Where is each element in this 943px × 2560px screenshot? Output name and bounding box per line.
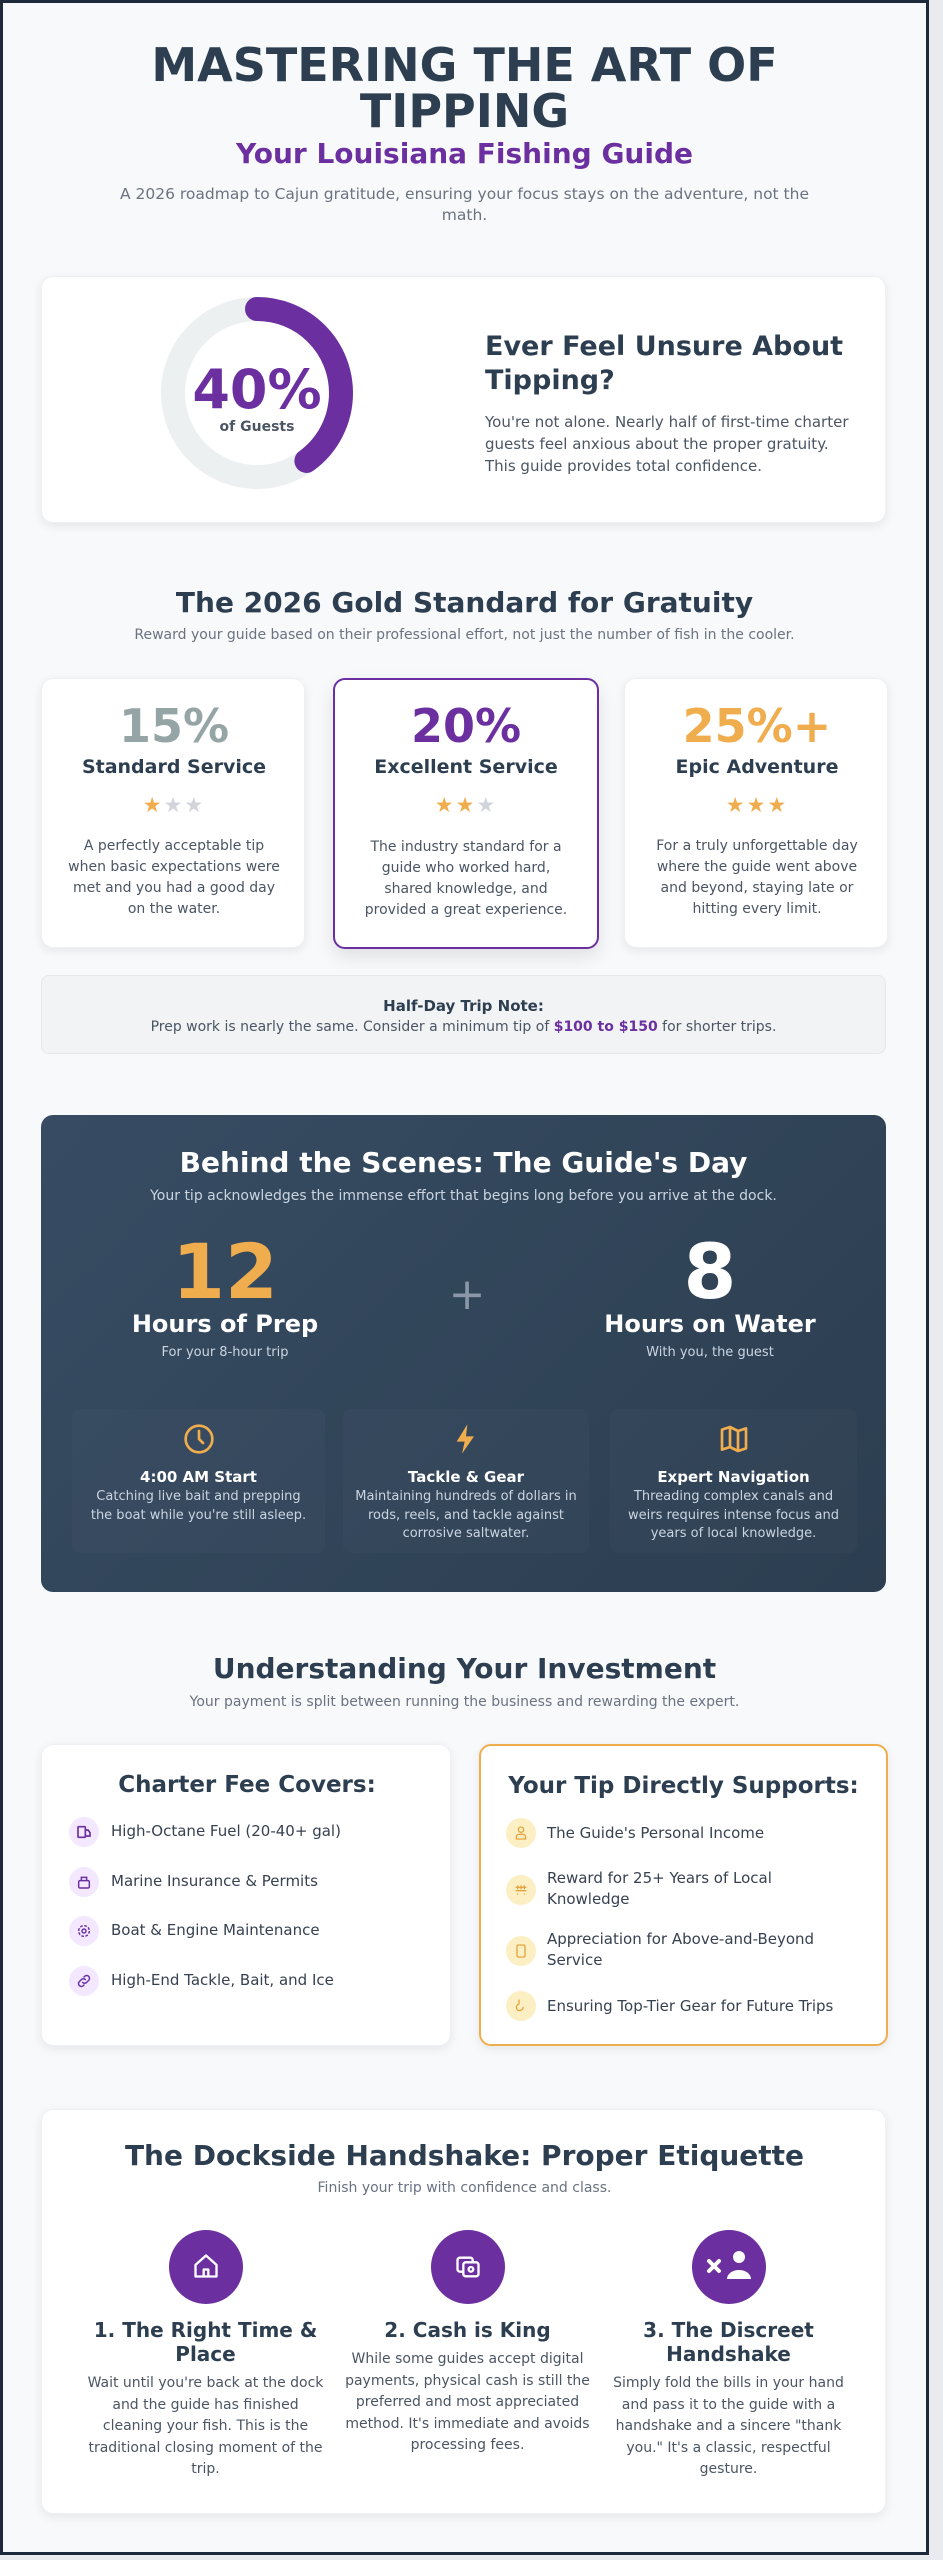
subheading: Your tip acknowledges the immense effort that begins long before you arrive at the dock. — [150, 1188, 777, 1204]
text: unsure: You're not alone. Nearly half of first-time charter — [485, 413, 848, 431]
icon: house — [169, 2230, 243, 2304]
tagline: A 2026 roadmap to Cajun gratitude, ensuring your focus stays on the adventure, not the — [120, 185, 809, 203]
item: insurance — [69, 1867, 99, 1897]
step 2: 2. Cash is King — [384, 2318, 551, 2342]
sub-card: tackle: Maintaining hundreds of dollars in — [355, 1489, 577, 1504]
panel: charter fee: High-Octane Fuel (20-40+ gal) — [111, 1822, 341, 1840]
callout: half-day note: Prep work is nearly the same. Consider a minimum tip of $100 to $150 for shorter trips. — [151, 1019, 776, 1035]
subheading: gold standard: Reward your guide based on their professional effort, not just the number of fish in the cooler. — [134, 627, 795, 643]
panel: 20%: The industry standard for a — [370, 839, 562, 855]
tagline: math. — [442, 206, 487, 224]
donut chart — [161, 297, 353, 489]
panel: tip supports: Ensuring Top-Tier Gear for Future Trips — [547, 1997, 833, 2015]
step 3: handshake and a sincere "thank — [616, 2418, 841, 2434]
sub-card: tackle: rods, reels, and tackle against — [368, 1508, 564, 1522]
panel: 20%: ★★★ — [435, 793, 497, 817]
sub-card: 4am: the boat while you're still asleep. — [91, 1508, 306, 1522]
panel: tip supports — [479, 1744, 888, 2046]
panel: 20%: 20% — [411, 699, 521, 753]
panel: charter fee: Boat & Engine Maintenance — [111, 1921, 320, 1939]
panel: 25%+: where the guide went above — [657, 859, 857, 875]
panel: 25%+: Epic Adventure — [676, 756, 838, 778]
panel: 20% — [333, 678, 599, 949]
item: maintenance — [69, 1916, 99, 1946]
icon: cash — [431, 2230, 505, 2304]
callout: half-day note — [41, 975, 886, 1054]
sub-card: navigation: years of local knowledge. — [651, 1526, 816, 1541]
step 3: 3. The Discreet — [643, 2318, 814, 2342]
sub-card: tackle — [343, 1409, 589, 1553]
panel: 15%: 15% — [119, 699, 229, 753]
stat: 12 hours prep: Hours of Prep — [132, 1310, 318, 1338]
step 1: cleaning your fish. This is the — [103, 2418, 308, 2434]
heading: unsure: Tipping? — [485, 365, 615, 396]
stat: 8 hours water: Hours on Water — [604, 1310, 816, 1338]
panel: tip supports: The Guide's Personal Income — [547, 1824, 764, 1842]
stat: 12 hours prep: 12 — [172, 1227, 278, 1316]
stat: 12 hours prep: For your 8-hour trip — [162, 1345, 288, 1360]
step 1: Wait until you're back at the dock — [88, 2375, 323, 2391]
subtitle: Your Louisiana Fishing Guide — [236, 137, 693, 170]
text: unsure: This guide provides total confidence. — [485, 457, 762, 475]
text: unsure — [484, 413, 849, 475]
panel: 15%: ★★★ — [143, 793, 205, 817]
panel: tip supports: Reward for 25+ Years of Local — [547, 1869, 772, 1887]
item: appreciation — [506, 1936, 536, 1966]
step 1 — [88, 2230, 324, 2477]
stat: 8 hours water: With you, the guest — [646, 1345, 774, 1360]
panel: 15%: Standard Service — [82, 756, 266, 778]
title — [151, 38, 778, 138]
item: income — [506, 1818, 536, 1848]
sub-card: navigation: weirs requires intense focus and — [628, 1508, 839, 1522]
stat: 12 hours prep — [132, 1227, 318, 1360]
panel: charter fee — [41, 1744, 451, 2046]
panel: 25%+: ★★★ — [726, 793, 788, 817]
panel: charter fee: Charter Fee Covers: — [118, 1772, 376, 1798]
step 1: traditional closing moment of the — [88, 2440, 323, 2456]
heading: guide's day: Behind the Scenes: The Guide's Day — [180, 1146, 747, 1179]
step 1: trip. — [191, 2461, 220, 2477]
panel: charter fee: High-End Tackle, Bait, and Ice — [111, 1971, 334, 1989]
icon: handshake — [692, 2230, 766, 2304]
callout: half-day note: Half-Day Trip Note: — [383, 997, 544, 1015]
step 3: Simply fold the bills in your hand — [613, 2375, 844, 2391]
panel: 40% stat — [41, 276, 886, 523]
icon: bolt — [456, 1424, 474, 1454]
panel: charter fee: Marine Insurance & Permits — [111, 1872, 318, 1890]
panel: 25%+: and beyond, staying late or — [661, 880, 853, 896]
sub-card: 4am: 4:00 AM Start — [140, 1468, 257, 1486]
tagline — [120, 185, 809, 224]
step 2: preferred and most appreciated — [356, 2394, 579, 2410]
stat: 8 hours water: 8 — [684, 1227, 736, 1316]
panel: 25%+ — [624, 678, 888, 948]
sub-card: navigation: Expert Navigation — [657, 1468, 810, 1486]
panel: 20%: guide who worked hard, — [382, 860, 550, 876]
step 3: and pass it to the guide with a — [622, 2396, 835, 2412]
item: knowledge — [506, 1875, 536, 1905]
item: gear — [506, 1991, 536, 2021]
sub-card: 4am: Catching live bait and prepping — [96, 1489, 301, 1504]
panel: tip supports: Your Tip Directly Supports: — [508, 1773, 859, 1799]
heading: gold standard: The 2026 Gold Standard for Gratuity — [176, 586, 753, 619]
panel: 25%+: 25%+ — [683, 699, 831, 753]
subheading: Finish your trip with confidence and class. — [318, 2180, 611, 2196]
sub-card: tackle: Tackle & Gear — [408, 1468, 524, 1486]
panel: 15%: met and you had a good day — [73, 880, 275, 896]
subheading: investment: Your payment is split between running the business and rewarding the expert. — [190, 1694, 739, 1710]
sub-card: tackle: corrosive saltwater. — [403, 1526, 529, 1541]
sub-card: navigation — [610, 1409, 857, 1553]
panel: 25%+: For a truly unforgettable day — [656, 838, 858, 854]
panel: tip supports: Knowledge — [547, 1890, 629, 1908]
step 1: 1. The Right Time & — [94, 2318, 317, 2342]
panel: 20%: provided a great experience. — [365, 902, 567, 918]
stat: 8 hours water — [604, 1227, 816, 1360]
panel: etiquette — [41, 2109, 886, 2514]
heading: investment: Understanding Your Investment — [213, 1652, 716, 1685]
panel: 15%: when basic expectations were — [68, 859, 280, 875]
panel: 20%: Excellent Service — [374, 756, 558, 778]
panel: 15% — [41, 678, 305, 948]
step 2 — [345, 2230, 590, 2453]
panel: guide's day — [41, 1115, 886, 1592]
title: TIPPING — [360, 84, 569, 138]
step 1: and the guide has finished — [112, 2396, 299, 2412]
item: tackle — [69, 1966, 99, 1996]
step 3: gesture. — [700, 2461, 757, 2477]
donut label: of Guests — [220, 419, 294, 435]
panel: 15%: A perfectly acceptable tip — [84, 838, 264, 854]
step 2: payments, physical cash is still the — [345, 2372, 590, 2388]
step 1: Place — [175, 2342, 236, 2366]
sub-card: 4am — [72, 1409, 325, 1553]
heading: etiquette: The Dockside Handshake: Proper Etiquette — [125, 2139, 804, 2172]
icon: plus: + — [449, 1269, 485, 1320]
step 3 — [613, 2230, 844, 2477]
step 2: method. It's immediate and avoids — [345, 2416, 590, 2432]
panel: 20%: shared knowledge, and — [384, 881, 548, 897]
step 3: Handshake — [666, 2342, 791, 2366]
title: MASTERING THE ART OF — [151, 38, 778, 92]
panel: tip supports: Service — [547, 1951, 602, 1969]
sub-card: navigation: Threading complex canals and — [634, 1489, 833, 1504]
icon: map — [720, 1426, 748, 1452]
donut value: 40% — [192, 358, 322, 421]
step 3: you." It's a classic, respectful — [626, 2440, 831, 2456]
panel: tip supports: Appreciation for Above-and-Beyond — [547, 1930, 814, 1948]
item: fuel — [69, 1817, 99, 1847]
step 2: While some guides accept digital — [352, 2351, 583, 2367]
heading: unsure: Ever Feel Unsure About — [485, 331, 843, 362]
icon: clock — [184, 1424, 214, 1454]
heading: unsure — [485, 331, 843, 396]
panel: 25%+: hitting every limit. — [692, 901, 822, 917]
text: unsure: guests feel anxious about the proper gratuity. — [485, 435, 829, 453]
step 2: processing fees. — [411, 2437, 524, 2453]
panel: 15%: on the water. — [128, 901, 220, 917]
